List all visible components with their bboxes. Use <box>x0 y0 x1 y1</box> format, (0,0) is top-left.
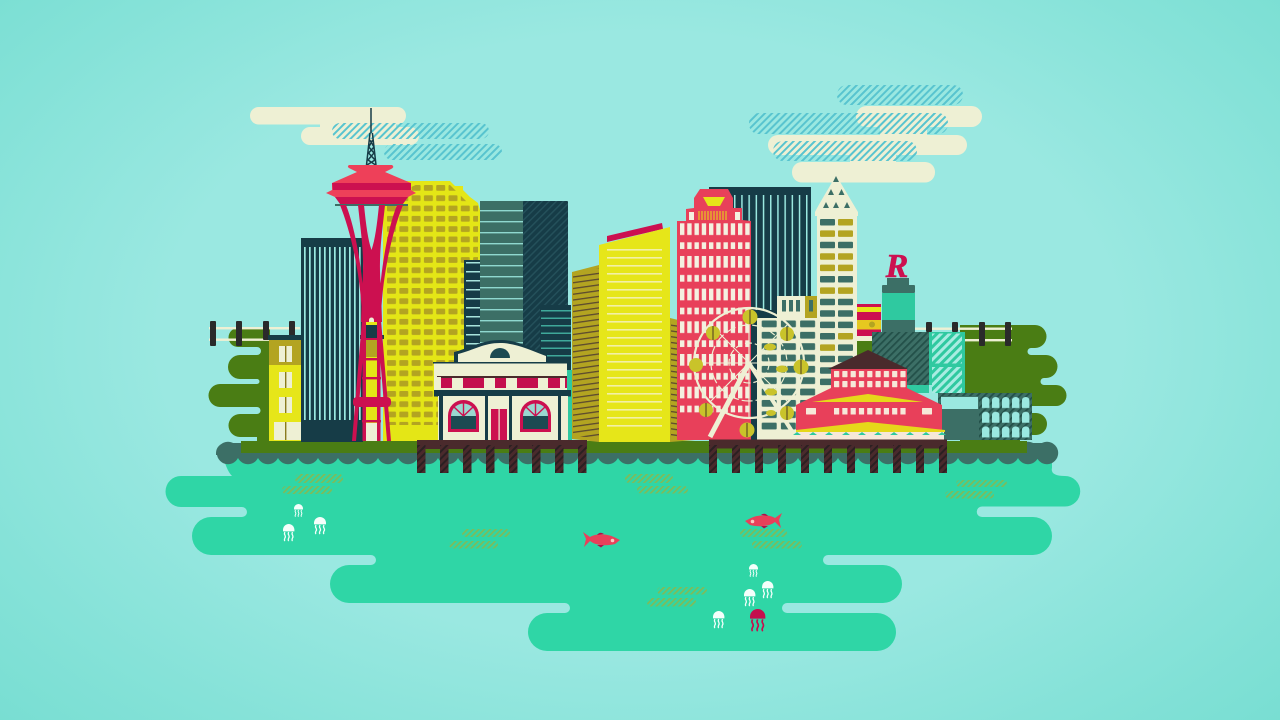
green hills right <box>960 325 1066 445</box>
saucer <box>326 165 416 202</box>
pier right <box>709 440 947 473</box>
dark teal tower <box>464 201 572 440</box>
dark striped tower <box>301 238 363 442</box>
rail left <box>209 321 300 346</box>
sea ripples <box>282 474 1007 606</box>
arch window left <box>448 400 479 432</box>
fish right <box>745 513 782 528</box>
smith tower <box>815 175 858 405</box>
yellow curved tower <box>383 181 480 441</box>
striped sign block <box>857 304 881 363</box>
museum <box>433 340 571 440</box>
jellyfish group left <box>283 504 326 541</box>
jellyfish group right <box>713 564 773 628</box>
shoreline band <box>216 441 1058 464</box>
legs <box>358 205 385 322</box>
dark tower behind ferris wheel <box>709 187 811 440</box>
fish left <box>583 532 620 548</box>
ferris wheel <box>689 308 808 438</box>
clouds right <box>749 85 982 182</box>
clouds left <box>250 107 502 160</box>
brewery tower with R sign <box>872 248 965 403</box>
market pavilion <box>793 350 946 440</box>
red art-deco tower <box>677 189 751 440</box>
tall yellow building with wings <box>572 223 695 442</box>
arch window right <box>520 400 551 432</box>
green hills left <box>209 328 270 445</box>
water <box>166 452 1080 651</box>
space needle <box>326 108 416 441</box>
rail right <box>915 322 1012 346</box>
small yellow building <box>268 335 302 441</box>
pier left <box>417 440 587 473</box>
door <box>491 409 507 440</box>
jellyfish red <box>750 609 765 631</box>
low teal building <box>938 393 1032 440</box>
spire <box>366 108 376 165</box>
cream office building <box>757 296 818 441</box>
brewery tower with R sign: R <box>885 248 908 285</box>
